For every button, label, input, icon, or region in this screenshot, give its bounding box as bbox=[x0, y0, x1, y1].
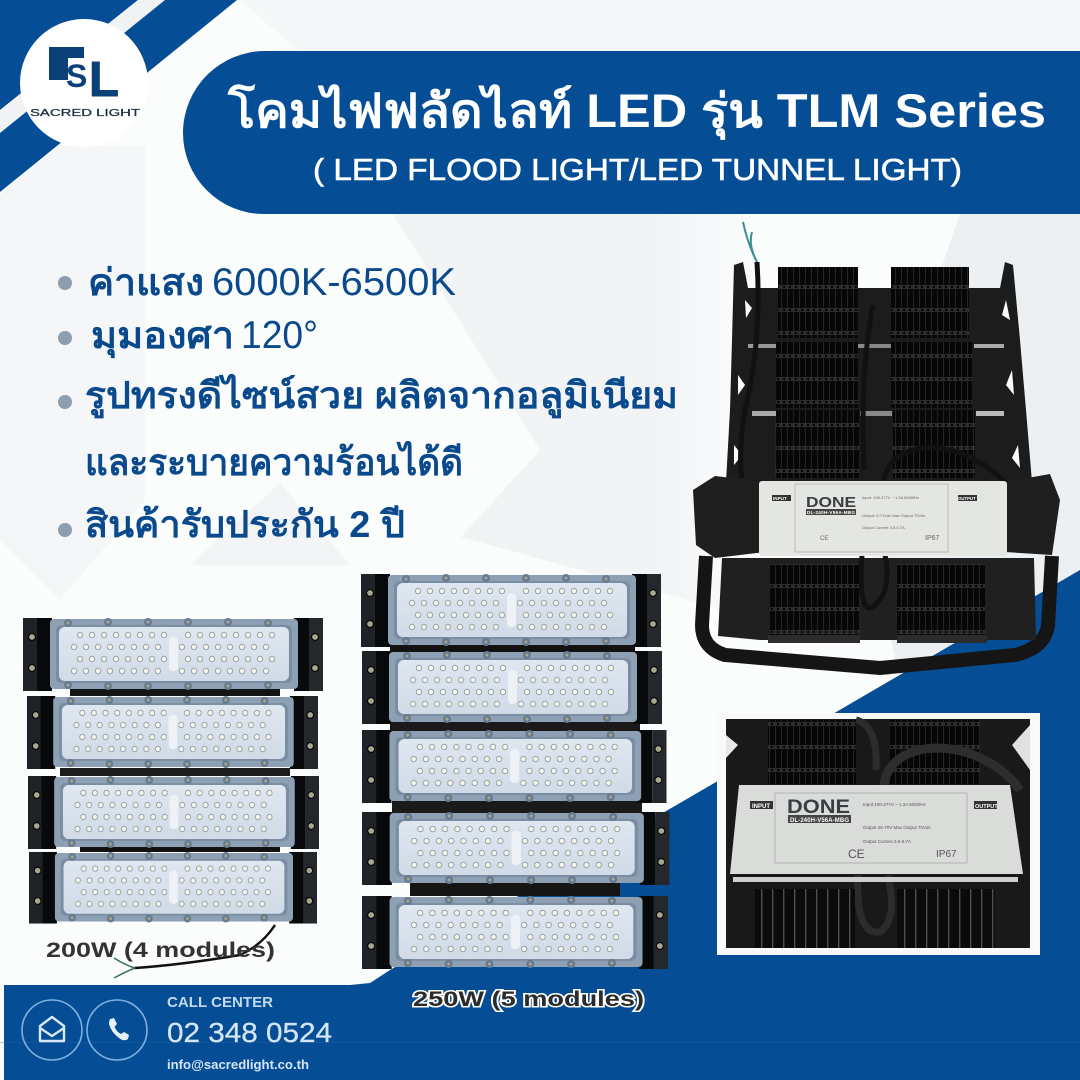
200W fixture photo bbox=[23, 618, 323, 978]
lower module bbox=[718, 558, 1036, 643]
250W fixture photo bbox=[361, 574, 670, 969]
call center label: CALL CENTER bbox=[167, 994, 273, 1011]
label: 200W: 200W (4 modules) bbox=[46, 939, 275, 962]
logo letter S: S bbox=[66, 58, 87, 94]
LED driver: DONE bbox=[806, 494, 856, 511]
inset driver label bbox=[730, 785, 1023, 874]
inset driver label: Output 25-70V Max Output 70Vdc bbox=[863, 825, 932, 830]
footer contact bbox=[22, 994, 332, 1072]
inset driver label: INPUT bbox=[752, 804, 770, 810]
phone number: 02 348 0524 bbox=[167, 1017, 332, 1048]
inset driver label: OUTPUT bbox=[975, 804, 998, 810]
bullet: warranty: สินค้ารับประกัน 2 ปี bbox=[85, 504, 405, 545]
LED driver: Input: 100-277V ~ 1.3A 50/60Hz bbox=[862, 495, 919, 500]
inset driver label: IP67 bbox=[936, 849, 957, 860]
rear modules bbox=[726, 262, 1032, 482]
logo wordmark: SACRED LIGHT bbox=[30, 108, 140, 119]
inset driver label: Input 100-277V ~ 1.3A 50/60Hz bbox=[863, 802, 927, 807]
logo bbox=[20, 19, 148, 147]
bullet: design and material: รูปทรงดีไซน์สวย ผลิตจากอลูมิเนียม bbox=[85, 373, 678, 419]
LED driver: OUTPUT bbox=[958, 496, 976, 501]
power wire bbox=[135, 925, 275, 968]
side mounts bbox=[693, 474, 1060, 558]
rear fixture photo bbox=[693, 222, 1060, 668]
inset driver photo bbox=[717, 713, 1040, 955]
LED driver bbox=[759, 481, 1007, 556]
feature list bbox=[58, 261, 678, 545]
email: info@sacredlight.co.th bbox=[167, 1057, 309, 1072]
bullet: design and material bbox=[58, 373, 678, 483]
bullet: colour temperature: ค่าแสง bbox=[88, 262, 204, 303]
title: โคมไฟฟลัดไลท์ LED รุ่น TLM Series bbox=[227, 83, 1046, 140]
LED driver: Output: 0-71Vdc Max Output 70Vdc bbox=[862, 513, 925, 518]
bullet: beam angle: มุมองศา bbox=[91, 315, 234, 359]
inset driver label: DL-240H-V56A-MBG bbox=[790, 818, 849, 824]
logo letter L: L bbox=[89, 53, 119, 107]
blue lower diagonal area and footer band bbox=[0, 570, 1080, 1080]
label: 250W: 250W (5 modules) bbox=[413, 988, 644, 1011]
bullet: design and material: และระบายความร้อนได้ดี bbox=[85, 440, 463, 483]
cables bbox=[741, 262, 1012, 608]
bullet: colour temperature bbox=[58, 261, 456, 304]
top-left diagonal stripes bbox=[0, 0, 237, 192]
subtitle: ( LED FLOOD LIGHT/LED TUNNEL LIGHT) bbox=[313, 152, 962, 187]
LED driver: CE bbox=[820, 536, 828, 542]
LED driver: IP67 bbox=[925, 535, 940, 542]
LED driver: DL-240H-V56A-MBG bbox=[807, 510, 855, 515]
bullet: colour temperature: 6000K-6500K bbox=[212, 261, 456, 304]
inset driver label: Output Current 3.5-5.7A bbox=[863, 839, 911, 844]
LED driver: INPUT bbox=[773, 496, 787, 501]
icon: phone bbox=[87, 1000, 147, 1060]
bullet: beam angle: 120° bbox=[241, 314, 318, 357]
supply wires bbox=[743, 222, 757, 262]
inset driver label: DONE bbox=[787, 797, 850, 818]
yoke bracket bbox=[702, 556, 1052, 668]
icon: mail bbox=[22, 1000, 82, 1060]
inset driver label: CE bbox=[848, 847, 865, 861]
header pill bbox=[183, 51, 1080, 214]
LED driver: Output Current 3.5-5.7A bbox=[862, 525, 905, 530]
bullet: beam angle bbox=[58, 314, 318, 359]
